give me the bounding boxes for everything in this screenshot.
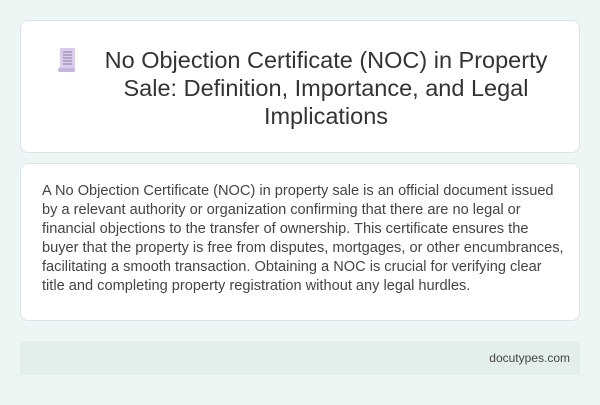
description text: title and completing property registration without any legal hurdles.: [42, 278, 470, 294]
description card: [20, 163, 580, 321]
description text: buyer that the property is free from disputes, mortgages, or other encumbrances,: [42, 240, 564, 256]
footer text: docutypes.com: [489, 351, 570, 365]
description text: financial objections to the transfer of ownership. This certificate ensures the: [42, 221, 528, 237]
title: No Objection Certificate (NOC) in Property Sale: Definition, Importance, and Legal Implications: [105, 47, 547, 129]
description text: by a relevant authority or organization confirming that there are no legal or: [42, 202, 521, 218]
description text: [42, 183, 564, 294]
icon: document: [58, 48, 75, 72]
header card: [20, 20, 580, 153]
description text: facilitating a smooth transaction. Obtaining a NOC is crucial for verifying clear: [42, 259, 542, 275]
description text: A No Objection Certificate (NOC) in property sale is an official document issued: [42, 183, 554, 199]
footer: [20, 341, 580, 375]
